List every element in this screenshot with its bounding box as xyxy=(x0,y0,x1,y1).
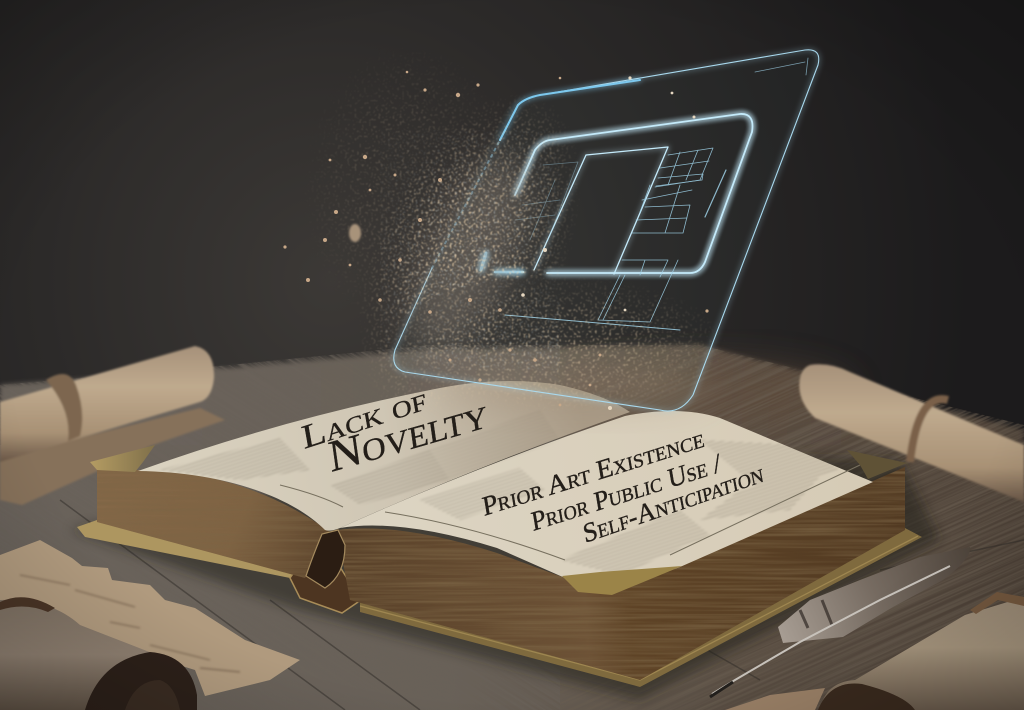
left page block xyxy=(97,470,329,578)
scroll: upper left xyxy=(0,346,225,505)
scroll: lower right xyxy=(725,592,1024,710)
parchment scrap xyxy=(725,688,825,710)
parchment: lower left xyxy=(0,540,300,696)
blue speckle field xyxy=(380,130,560,370)
gold corner: front xyxy=(562,566,682,595)
scroll: lower left xyxy=(0,597,197,710)
blueprint grid xyxy=(505,148,726,330)
dust particles xyxy=(283,70,712,410)
gold corner: left xyxy=(90,445,155,472)
left page surface xyxy=(138,381,630,531)
table shadow under book xyxy=(70,450,940,700)
title: lack of novelty: Lack of xyxy=(299,380,429,457)
haze behind hologram xyxy=(430,363,710,407)
page margin lines xyxy=(280,465,860,560)
gold corner: right xyxy=(847,450,907,479)
hologram panel xyxy=(394,50,819,411)
right page block xyxy=(330,460,910,685)
feather quill xyxy=(710,547,970,697)
book xyxy=(77,381,922,687)
corner ticks xyxy=(755,58,808,75)
parchment under upper-left scroll xyxy=(0,408,225,505)
soft dust cloud xyxy=(389,142,551,368)
book bottom cover xyxy=(77,520,922,687)
text: legal grounds: Prior Art Existence xyxy=(480,422,706,522)
scroll: upper right xyxy=(799,364,1024,502)
text: legal grounds: Prior Public Use / xyxy=(529,448,723,537)
spine notch xyxy=(290,535,361,613)
text: legal grounds: Self-Anticipation xyxy=(580,457,766,549)
panel outer frame xyxy=(394,50,819,411)
large particles xyxy=(283,71,709,410)
inner window xyxy=(534,147,668,274)
speckle field xyxy=(322,72,712,401)
right page surface xyxy=(340,411,873,592)
inner frame xyxy=(481,114,752,273)
text: legal grounds xyxy=(480,422,766,549)
panel fill xyxy=(394,50,819,411)
wooden table xyxy=(0,345,1024,710)
gutter xyxy=(306,530,345,588)
title: lack of novelty: Novelty xyxy=(326,388,490,482)
faint body text on pages xyxy=(160,410,840,575)
